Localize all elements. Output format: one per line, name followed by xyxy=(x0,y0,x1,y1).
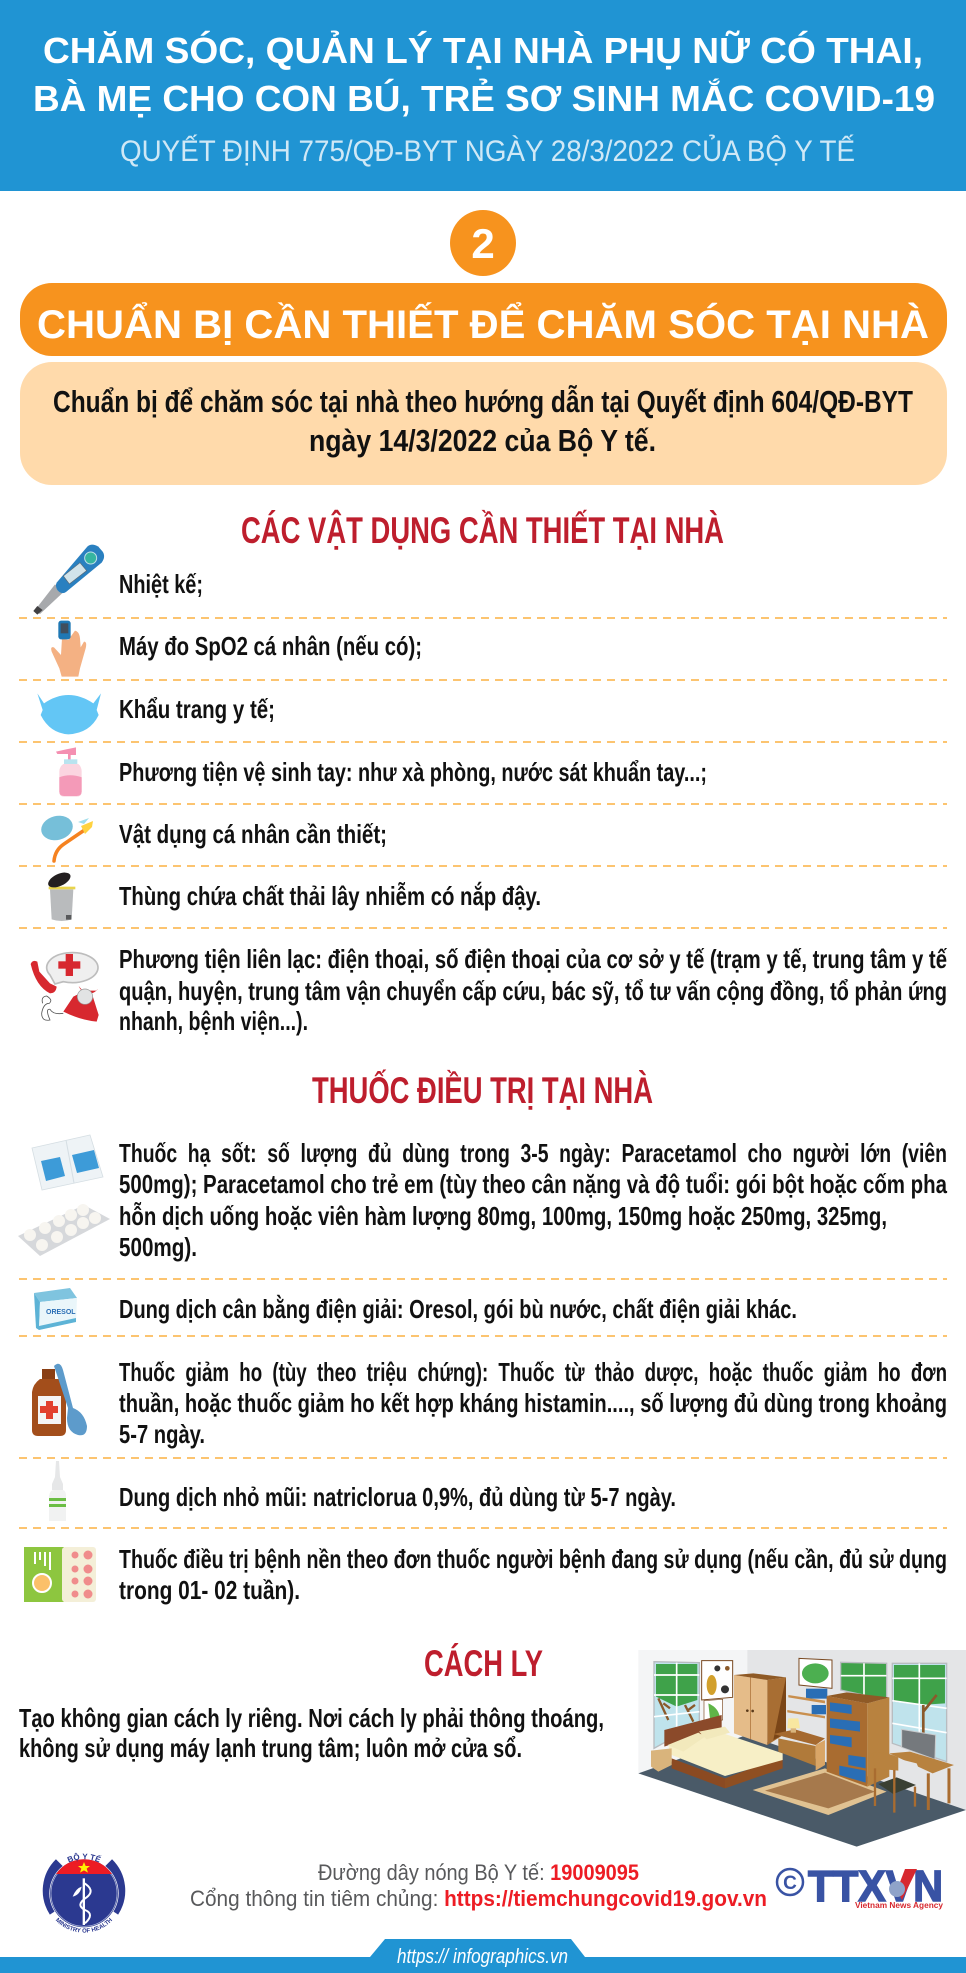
logo: Ministry of Health: MINISTRY OF HEALTH xyxy=(56,1918,112,1933)
item: pulse oximeter xyxy=(51,621,422,677)
item: mask: Khẩu trang y tế; xyxy=(119,694,275,724)
hotline text: Đường dây nóng Bộ Y tế: 19009095 xyxy=(318,1860,639,1885)
intro panel: ngày 14/3/2022 của Bộ Y tế. xyxy=(309,423,656,458)
item: thermometer: Nhiệt kế; xyxy=(119,569,203,599)
right windows xyxy=(841,1662,947,1762)
icon: phones with medical bubble xyxy=(31,953,99,1022)
item: hand hygiene xyxy=(56,747,707,797)
icon: oresol box: ORESOL xyxy=(46,1309,76,1316)
text: isolation: không sử dụng máy lạnh trung tâm; luôn mở cửa sổ. xyxy=(19,1733,522,1763)
title xyxy=(33,29,935,119)
bed xyxy=(664,1715,783,1788)
item: personal items: Vật dụng cá nhân cần thiết; xyxy=(119,819,387,849)
text: chronic medicine: trong 01- 02 tuần). xyxy=(119,1575,300,1605)
icon: blister pack xyxy=(18,1204,110,1256)
icon: soap and toothbrush xyxy=(39,812,93,861)
title: CHĂM SÓC, QUẢN LÝ TẠI NHÀ PHỤ NỮ CÓ THAI, xyxy=(43,29,923,71)
hotline text: Cổng thông tin tiêm chủng: https://tiemchungcovid19.gov.vn xyxy=(190,1886,767,1911)
left window xyxy=(654,1662,699,1748)
text: communication: nhanh, bệnh viện...). xyxy=(119,1006,308,1036)
icon: green pill pack xyxy=(24,1547,96,1602)
item: personal items xyxy=(39,812,387,861)
section heading pill xyxy=(20,283,947,356)
section number badge xyxy=(450,210,516,276)
wardrobe xyxy=(734,1673,786,1745)
heading: isolation: CÁCH LY xyxy=(424,1643,543,1684)
icon: thermometer xyxy=(33,545,104,615)
logo: TTXVN: C xyxy=(783,1873,797,1894)
header banner xyxy=(0,0,966,191)
item: communication xyxy=(31,944,947,1036)
icon: face mask xyxy=(37,693,101,734)
illustration: bedroom xyxy=(638,1650,966,1847)
logo: Ministry of Health xyxy=(42,1852,126,1933)
item: mask xyxy=(37,693,275,734)
text: isolation: Tạo không gian cách ly riêng. Nơi cách ly phải thông thoáng, xyxy=(19,1703,604,1733)
icon: oresol box xyxy=(34,1288,77,1330)
title: BÀ MẸ CHO CON BÚ, TRẺ SƠ SINH MẮC COVID-19 xyxy=(33,77,935,119)
hotline text xyxy=(190,1860,767,1911)
text: isolation xyxy=(19,1703,604,1763)
shelves with books xyxy=(787,1689,827,1718)
chair xyxy=(873,1753,916,1813)
item: nasal drops xyxy=(49,1461,676,1521)
item: waste bin xyxy=(46,869,541,921)
bookcase xyxy=(827,1692,889,1787)
item: cough medicine xyxy=(32,1357,947,1449)
item: hand hygiene: Phương tiện vệ sinh tay: như xà phòng, nước sát khuẩn tay...; xyxy=(119,757,707,787)
text: communication xyxy=(119,944,947,1036)
item: chronic disease medicine xyxy=(24,1544,947,1605)
text: fever medicine: 500mg). xyxy=(119,1232,197,1262)
icon: soap pump bottle xyxy=(56,747,82,797)
wall posters xyxy=(702,1658,832,1723)
icon: hand with oximeter xyxy=(51,621,86,677)
text: chronic medicine xyxy=(119,1544,947,1605)
section number badge: 2 xyxy=(471,220,495,267)
text: cough medicine: 5-7 ngày. xyxy=(119,1419,205,1449)
item: pulse oximeter: Máy đo SpO2 cá nhân (nếu có); xyxy=(119,631,422,661)
desk with monitor xyxy=(889,1729,954,1810)
icon: sachets xyxy=(32,1135,103,1190)
item: electrolytes xyxy=(34,1288,797,1330)
item: fever medicine xyxy=(18,1135,947,1262)
dresser and lamp xyxy=(773,1718,825,1771)
item: nasal drops: Dung dịch nhỏ mũi: natriclorua 0,9%, đủ dùng từ 5-7 ngày. xyxy=(119,1482,676,1512)
intro panel xyxy=(20,362,947,485)
heading: medicines: THUỐC ĐIỀU TRỊ TẠI NHÀ xyxy=(312,1069,653,1111)
heading: supplies: CÁC VẬT DỤNG CẦN THIẾT TẠI NHÀ xyxy=(241,509,724,551)
text: cough medicine xyxy=(119,1357,947,1449)
footer bar xyxy=(0,1939,966,1973)
logo: TTXVN: Vietnam News Agency xyxy=(855,1901,944,1910)
logo: TTXVN: TTXVN xyxy=(808,1862,943,1911)
nightstand xyxy=(651,1748,672,1772)
icon: nasal drop bottle xyxy=(49,1461,66,1521)
icon: pedal bin xyxy=(46,869,75,921)
item: waste bin: Thùng chứa chất thải lây nhiễm có nắp đậy. xyxy=(119,881,541,911)
footer bar: https:// infographics.vn xyxy=(397,1946,568,1968)
rug xyxy=(753,1768,887,1815)
item: thermometer xyxy=(33,545,203,615)
section heading pill: CHUẨN BỊ CẦN THIẾT ĐỂ CHĂM SÓC TẠI NHÀ xyxy=(37,300,929,347)
text: fever medicine xyxy=(119,1138,947,1262)
icon: syrup bottle and spoon xyxy=(32,1364,87,1436)
logo: Ministry of Health: BỘ Y TẾ xyxy=(67,1852,102,1862)
subtitle: QUYẾT ĐỊNH 775/QĐ-BYT NGÀY 28/3/2022 CỦA BỘ Y TẾ xyxy=(120,134,855,168)
